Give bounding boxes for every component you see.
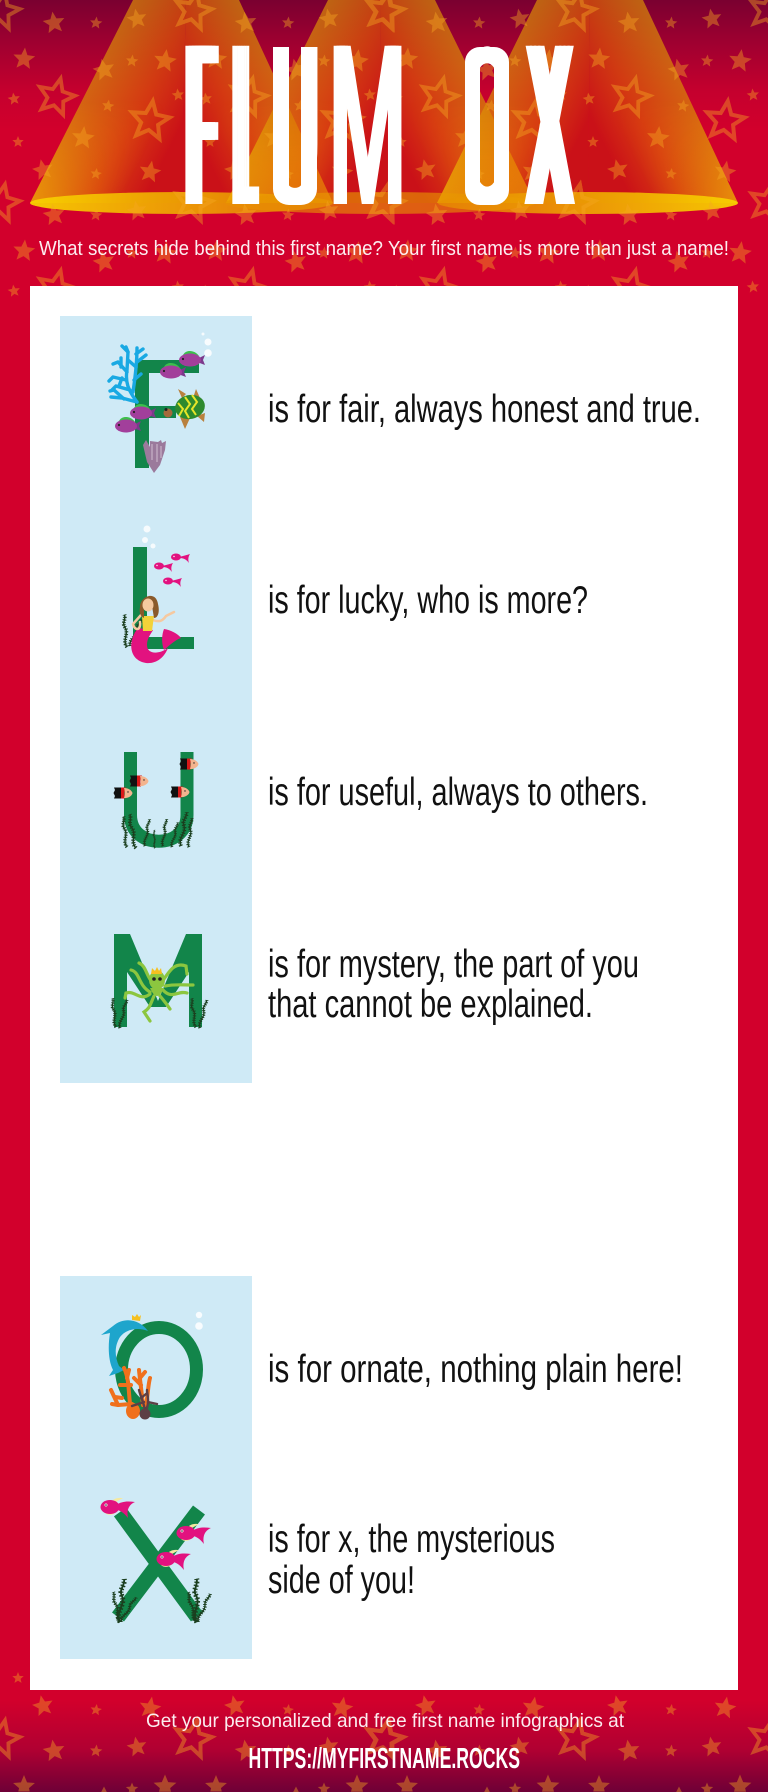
title: U — [267, 0, 323, 251]
title: M — [326, 0, 403, 253]
panel: letters F L U M background — [60, 316, 252, 1083]
red side band — [0, 300, 768, 1665]
text: X row: side of you! — [268, 1559, 415, 1602]
title: X — [523, 0, 564, 253]
footer url: HTTPS://MYFIRSTNAME.ROCKS — [248, 1743, 520, 1775]
text: L row: is for lucky, who is more? — [268, 579, 588, 622]
text: X row — [268, 1518, 555, 1602]
footer prompt: Get your personalized and free first name infographics at — [146, 1710, 625, 1732]
panel: letters O X background — [60, 1276, 252, 1659]
text: M row — [268, 943, 639, 1026]
title: F — [182, 0, 207, 253]
icon: letter M with octopus — [111, 934, 207, 1028]
title: L — [230, 0, 246, 253]
subtitle: What secrets hide behind this first name? Your first name is more than just a name! — [39, 238, 729, 260]
text: X row: is for x, the mysterious — [268, 1518, 555, 1561]
text: U row: is for useful, always to others. — [268, 771, 648, 814]
text: M row: is for mystery, the part of you — [268, 943, 639, 986]
white content panel — [30, 286, 738, 1690]
spotlight cones — [30, 0, 738, 214]
icon: letter L with mermaid — [122, 526, 194, 663]
icon: letter O with dolphin and coral — [101, 1312, 203, 1420]
icon: letter U with fish and seaweed — [114, 752, 198, 848]
title: O — [462, 1, 512, 249]
title — [182, 0, 575, 253]
text: M row: that cannot be explained. — [268, 983, 593, 1026]
icon: letter X with fish and seaweed — [100, 1498, 211, 1622]
icon: letter F with reef — [109, 332, 212, 473]
